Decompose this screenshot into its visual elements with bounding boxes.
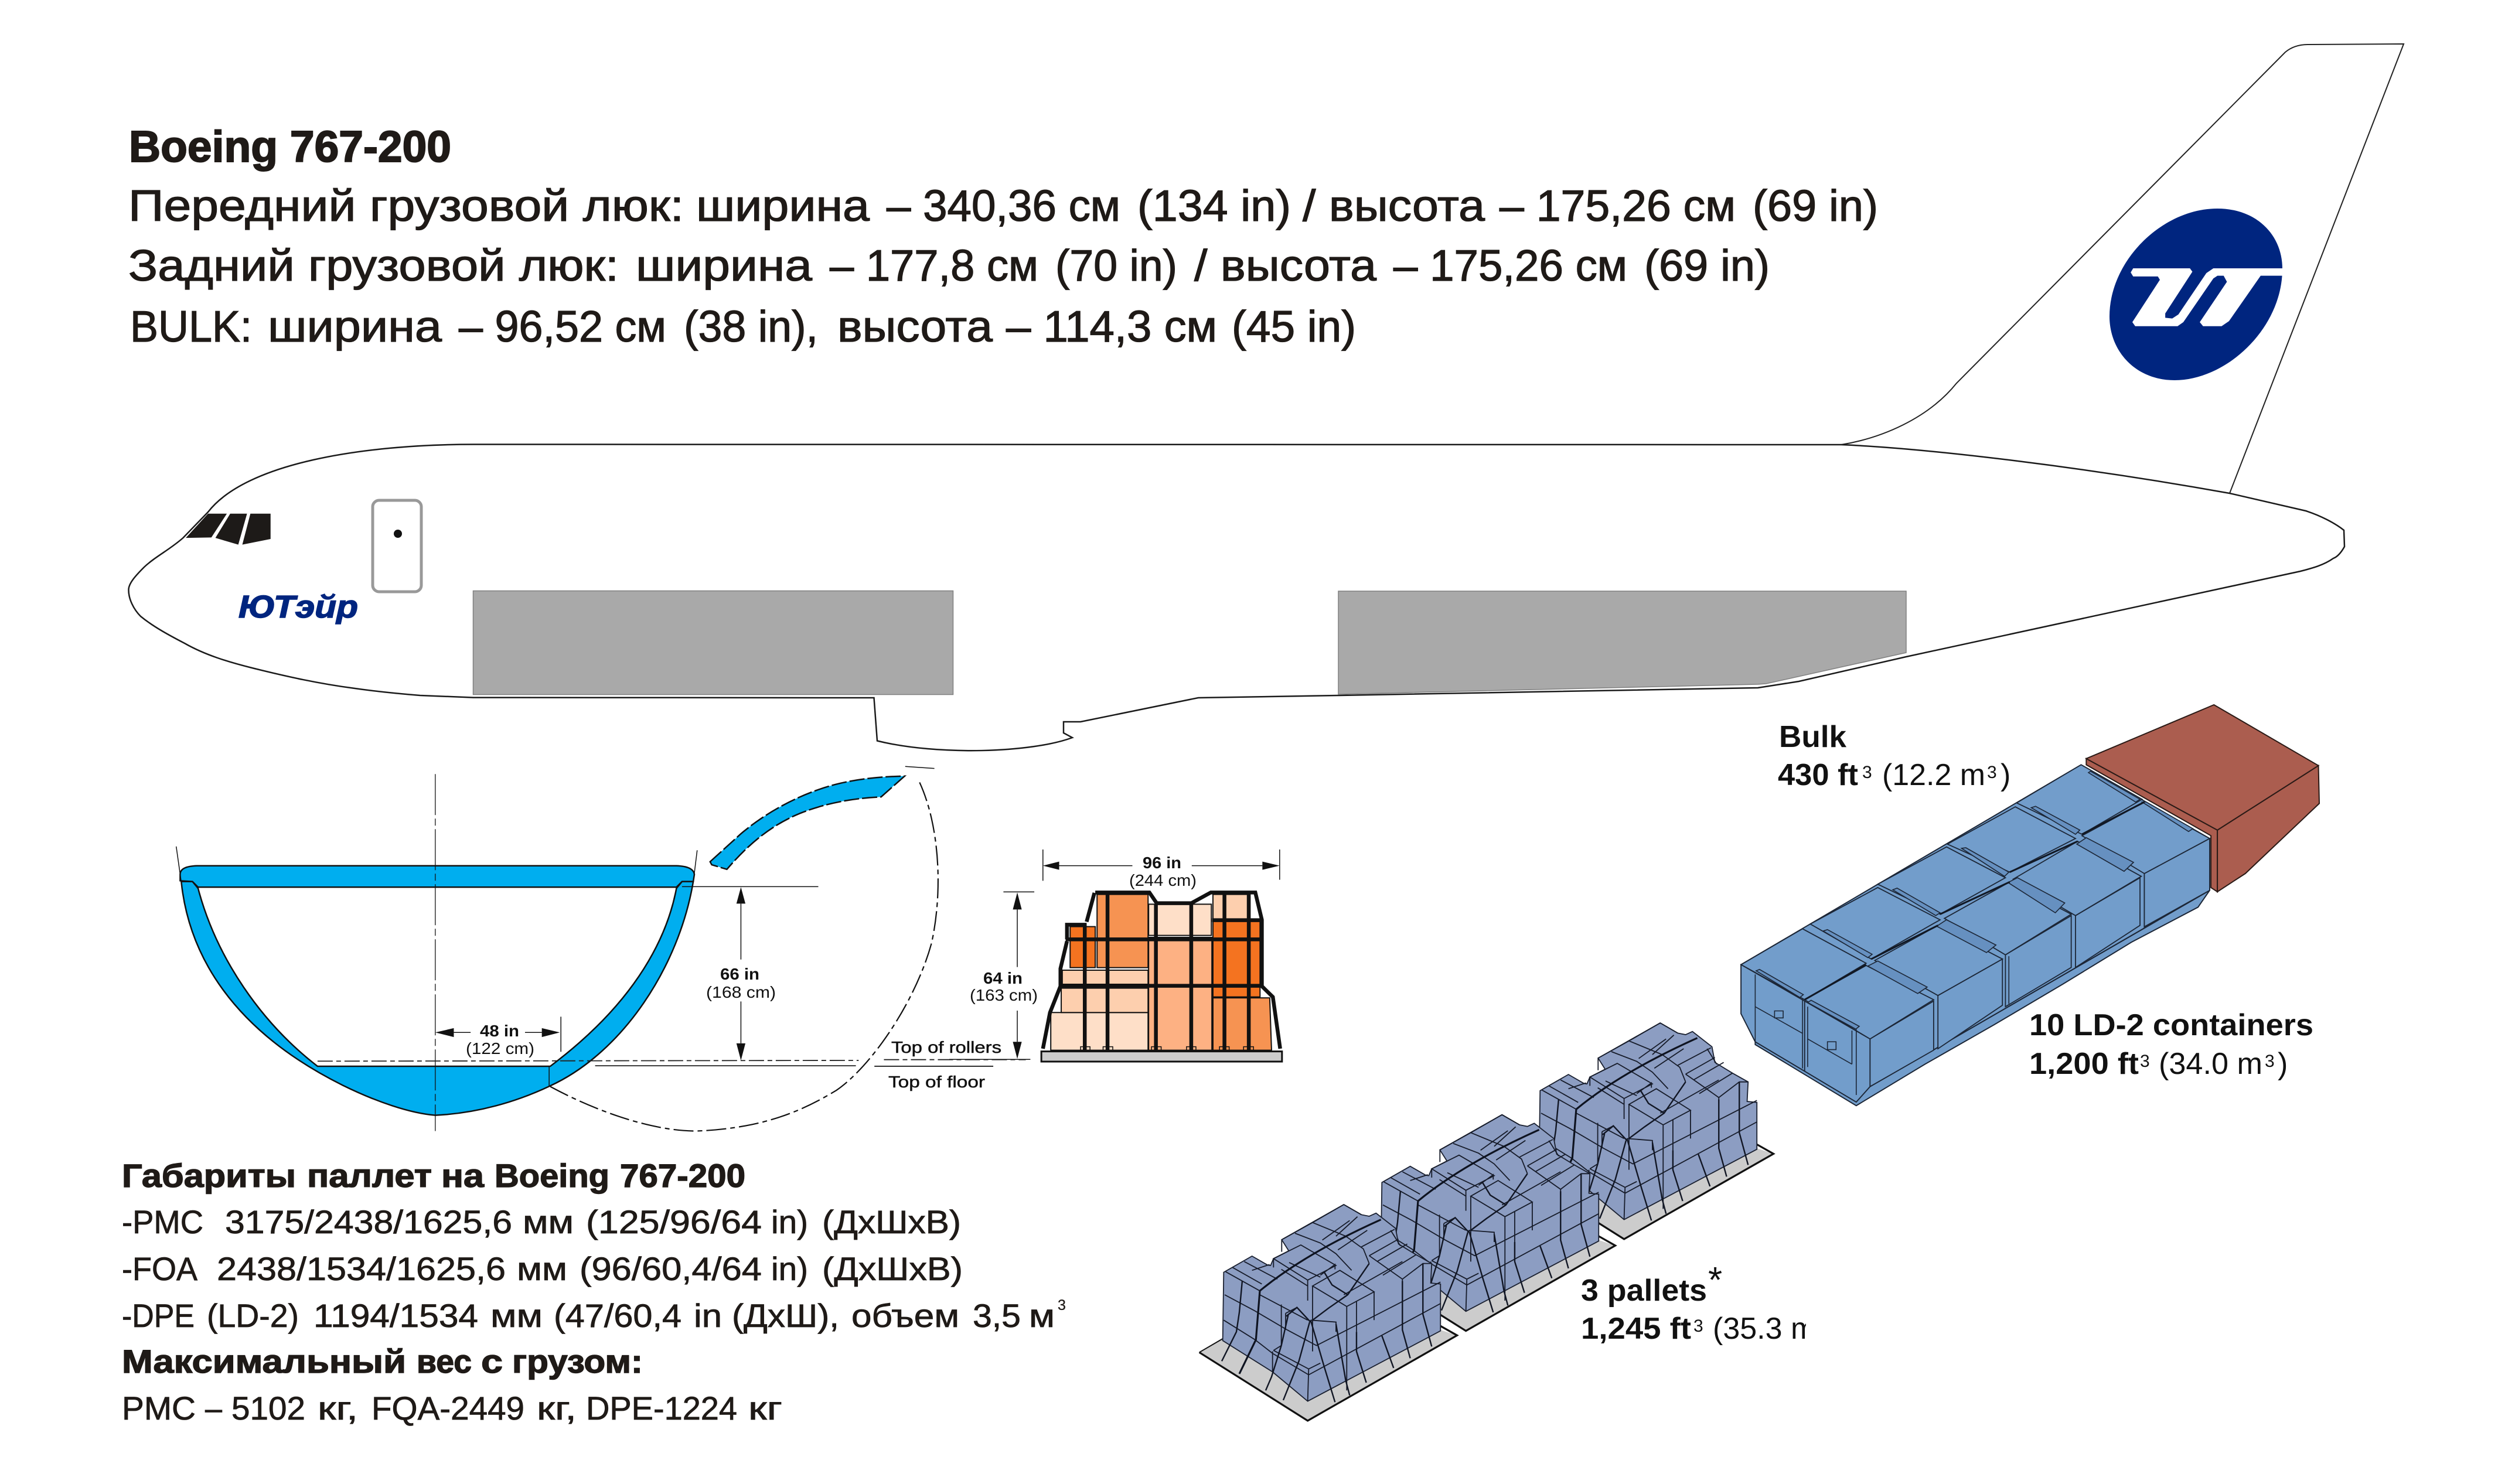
label: LD-2 containers: 1,200 ft <box>2029 1047 2139 1081</box>
net straps <box>1043 892 1280 1050</box>
label: 3 pallets <box>1582 1267 1806 1345</box>
label: bulk: (12.2 m <box>1882 758 1985 792</box>
pallet front view diagram: (244 cm) <box>1129 871 1197 889</box>
airline name on fuselage: ЮТэйр <box>238 589 358 625</box>
heading: aircraft and cargo door dimensions: – 177,8 см <box>830 241 1038 290</box>
heading: aircraft and cargo door dimensions: ширина <box>636 241 812 290</box>
pallet specifications text block: кг, <box>537 1390 577 1427</box>
heading: aircraft and cargo door dimensions: – 96,52 см <box>459 302 666 351</box>
pallet specifications text block: -PMC <box>122 1203 203 1240</box>
pallet specifications text block: (47/60,4 <box>554 1297 681 1334</box>
pallet specifications text block: 3 <box>1058 1297 1066 1314</box>
icon: passenger door <box>373 500 421 592</box>
pallet 1 <box>1199 1205 1457 1421</box>
pallet specifications text block: м <box>1029 1297 1055 1334</box>
label: 3 pallets: 1,245 ft <box>1581 1312 1691 1346</box>
pallet front view diagram: 96 in <box>1143 854 1181 872</box>
cross-section diagram: 48 in <box>480 1022 519 1040</box>
cross-section diagram: Top of rollers <box>891 1038 1001 1056</box>
pallet 3 <box>1516 1023 1774 1239</box>
pallet 2 <box>1358 1115 1616 1331</box>
pallet specifications text block: Boeing <box>495 1157 609 1194</box>
pallet specifications text block: вес <box>417 1343 472 1380</box>
label: LD-2 containers: 3 <box>2265 1052 2275 1071</box>
forward cargo door <box>473 591 953 695</box>
pallet specifications text block: 767-200 <box>620 1157 745 1194</box>
label: LD-2 containers: 10 LD-2 containers <box>2029 1008 2313 1042</box>
pallet specifications text block: -DPE <box>122 1297 195 1334</box>
pallet specifications text block: Максимальный <box>122 1343 406 1380</box>
heading: aircraft and cargo door dimensions <box>128 122 1878 351</box>
pallet specifications text block: грузом: <box>512 1343 643 1380</box>
hull and floor <box>181 882 693 1115</box>
pallet specifications text block: объем <box>851 1297 959 1334</box>
pallet specifications text block: (LD-2) <box>207 1297 299 1334</box>
aft cargo door <box>1338 591 1906 694</box>
cross-section diagram: 66 in <box>720 965 759 983</box>
pallet front view diagram: (163 cm) <box>970 986 1038 1004</box>
label: 3 pallets: * <box>1708 1260 1722 1301</box>
pallet specifications text block: Габариты <box>122 1157 296 1194</box>
pallet specifications text block: мм <box>523 1203 574 1240</box>
heading: aircraft and cargo door dimensions: – 114,3 см <box>1006 302 1217 351</box>
pallet specifications text block: (ДхШхВ) <box>822 1203 961 1240</box>
bulk compartment block <box>2086 705 2319 892</box>
heading: aircraft and cargo door dimensions: – 340,36 см <box>887 181 1120 230</box>
pallet specifications text block: (ДхШ), <box>732 1297 839 1334</box>
pallet specifications text block: in) <box>771 1203 808 1240</box>
pallet boxes <box>1051 895 1272 1050</box>
heading: aircraft and cargo door dimensions: – 175,26 см <box>1393 241 1627 290</box>
heading: aircraft and cargo door dimensions: ширина <box>268 302 442 351</box>
heading: aircraft and cargo door dimensions: Передний грузовой люк: <box>128 181 684 230</box>
aircraft fuselage outline <box>128 444 2344 750</box>
pallet specifications text block: 3175/2438/1625,6 <box>225 1203 512 1240</box>
heading: aircraft and cargo door dimensions: (70 in) <box>1055 241 1177 290</box>
heading: aircraft and cargo door dimensions: Задний грузовой люк: <box>128 241 619 290</box>
pallet specifications text block <box>122 1157 1066 1427</box>
pallet specifications text block: -FOA <box>122 1250 198 1287</box>
heading: aircraft and cargo door dimensions: (134 in) <box>1137 181 1291 230</box>
pallet specifications text block: с <box>481 1343 503 1380</box>
cross-section diagram <box>176 766 1026 1131</box>
heading: aircraft and cargo door dimensions: (38 in), <box>684 302 818 351</box>
pallet front view diagram <box>949 850 1282 1062</box>
pallet specifications text block: (125/96/64 <box>586 1203 762 1240</box>
label: bulk: 3 <box>1862 763 1872 782</box>
pallet specifications text block: in <box>694 1297 722 1334</box>
label: bulk <box>1778 720 2010 792</box>
label: bulk: 3 <box>1987 763 1997 782</box>
pallet specifications text block: 5102 <box>231 1390 305 1427</box>
label: 3 pallets: (35.3 m <box>1713 1312 1816 1346</box>
label: LD-2 containers <box>2029 1008 2313 1081</box>
label: LD-2 containers: 3 <box>2140 1052 2150 1071</box>
cross-section diagram: Top of floor <box>888 1073 985 1091</box>
heading: aircraft and cargo door dimensions: (45 in) <box>1232 302 1356 351</box>
pallet specifications text block: кг <box>748 1390 782 1427</box>
pallet specifications text block: паллет <box>307 1157 432 1194</box>
heading: aircraft and cargo door dimensions: BULK: <box>130 302 252 351</box>
pallet specifications text block: – <box>205 1390 223 1427</box>
pallet front view diagram: 64 in <box>983 969 1023 987</box>
label: bulk: 430 ft <box>1778 758 1858 792</box>
heading: aircraft and cargo door dimensions: / высота <box>1303 181 1485 230</box>
pallet base <box>1041 1052 1282 1062</box>
pallet specifications text block: FQA-2449 <box>372 1390 524 1427</box>
heading: aircraft and cargo door dimensions: высота <box>837 302 993 351</box>
heading: aircraft and cargo door dimensions: (69 in) <box>1753 181 1878 230</box>
pallet specifications text block: 3,5 <box>973 1297 1021 1334</box>
icon: cockpit windows <box>186 514 271 545</box>
cross-section diagram: (168 cm) <box>706 983 776 1001</box>
pallet specifications text block: 2438/1534/1625,6 <box>217 1250 506 1287</box>
heading: aircraft and cargo door dimensions: ширина <box>696 181 870 230</box>
label: LD-2 containers: ) <box>2278 1047 2288 1081</box>
three netted pallets <box>1199 1023 1774 1421</box>
icon: airline logo on tail <box>2110 209 2282 380</box>
pallet specifications text block: 1194/1534 <box>313 1297 478 1334</box>
pallet specifications text block: DPE-1224 <box>586 1390 737 1427</box>
heading: aircraft and cargo door dimensions: / высота <box>1194 241 1376 290</box>
pallet specifications text block: in) <box>771 1250 808 1287</box>
label: 3 pallets: 3 <box>1693 1316 1703 1336</box>
heading: aircraft and cargo door dimensions: (69 in) <box>1644 241 1770 290</box>
pallet specifications text block: PMC <box>122 1390 196 1427</box>
pallet specifications text block: мм <box>490 1297 543 1334</box>
cargo door section <box>710 776 905 869</box>
tail fin <box>1841 44 2404 493</box>
pallet specifications text block: мм <box>517 1250 567 1287</box>
pallet specifications text block: (96/60,4/64 <box>580 1250 762 1287</box>
label: 3 pallets: 3 pallets <box>1581 1274 1707 1308</box>
label: LD-2 containers: (34.0 m <box>2159 1047 2262 1081</box>
LD-2 containers <box>1741 765 2210 1106</box>
pallet specifications text block: кг, <box>318 1390 358 1427</box>
label: bulk: ) <box>2001 758 2010 792</box>
heading: aircraft and cargo door dimensions: Boeing 767-200 <box>129 122 451 171</box>
cross-section diagram: (122 cm) <box>466 1039 534 1057</box>
pallet specifications text block: на <box>441 1157 485 1194</box>
upper beam <box>180 866 694 887</box>
heading: aircraft and cargo door dimensions: – 175,26 см <box>1500 181 1736 230</box>
label: bulk: Bulk <box>1779 720 1846 754</box>
pallet specifications text block: (ДхШхВ) <box>822 1250 963 1287</box>
